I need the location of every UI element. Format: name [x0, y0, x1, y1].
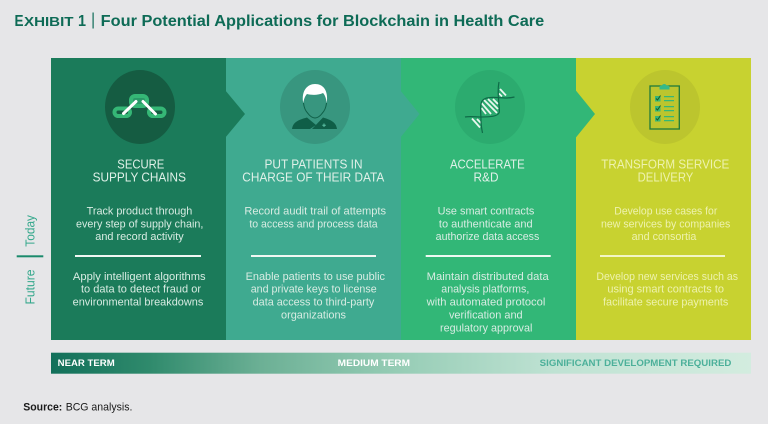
icon: DNA helix	[455, 70, 525, 144]
panel: put patients in charge	[225, 58, 401, 340]
heading: put patients in charge of their data: CHARGE OF THEIR DATA	[242, 169, 385, 184]
text: today: and consortia	[632, 231, 697, 243]
text: today: every step of supply chain,	[76, 218, 203, 230]
icon: chain links	[105, 70, 175, 144]
timeline bar	[51, 353, 751, 374]
heading: transform service delivery: TRANSFORM SERVICE	[601, 156, 730, 172]
text: today	[76, 206, 203, 243]
timeline bar: MEDIUM TERM	[338, 358, 410, 369]
text: future: facilitate secure payments	[603, 297, 729, 309]
heading: put patients in charge of their data	[242, 156, 385, 184]
text: future: to data to detect fraud or	[81, 284, 201, 296]
heading: transform service delivery: DELIVERY	[638, 169, 694, 184]
text: today	[244, 206, 387, 230]
title: E	[14, 13, 24, 30]
text: future: data access to third-party	[253, 297, 375, 309]
text: future: Develop new services such as	[596, 271, 739, 283]
text: future	[596, 271, 739, 309]
title: XHIBIT	[24, 15, 74, 29]
timeline bar: NEAR TERM	[58, 358, 115, 369]
heading: transform service delivery	[601, 156, 730, 184]
text: future: organizations	[281, 310, 346, 322]
panel: accelerate R&D	[400, 58, 576, 340]
text: today: Develop use cases for	[614, 206, 718, 218]
axis: today and future labels	[17, 214, 43, 304]
text: today: Record audit trail of attempts	[244, 206, 387, 218]
axis: today and future labels: Future	[24, 269, 38, 304]
heading: put patients in charge of their data: PUT PATIENTS IN	[264, 156, 362, 172]
text: future	[246, 271, 385, 322]
text: today: authorize data access	[436, 231, 540, 243]
text: future	[73, 271, 206, 309]
text: today	[436, 206, 540, 243]
text: today: and record activity	[95, 231, 184, 243]
text: today	[601, 206, 731, 243]
text: today: Track product through	[87, 206, 192, 218]
text: today: new services by companies	[601, 218, 731, 230]
text: future: regulatory approval	[440, 322, 532, 334]
text: future: and private keys to license	[251, 284, 377, 296]
panel: secure supply chains	[51, 58, 226, 340]
heading: accelerate R&D: R&D	[474, 169, 498, 184]
icon: clipboard checklist	[630, 70, 700, 144]
title: 1	[78, 13, 86, 30]
text: today: to access and process data	[249, 218, 378, 230]
text: future: Apply intelligent algorithms	[73, 271, 206, 283]
text: future: using smart contracts to	[607, 284, 724, 296]
text: future: analysis platforms,	[441, 284, 529, 296]
timeline bar: SIGNIFICANT DEVELOPMENT REQUIRED	[540, 358, 732, 369]
source note	[23, 402, 132, 414]
panel: transform service delivery	[576, 58, 751, 340]
text: future: verification and	[449, 310, 523, 322]
text: future: Enable patients to use public	[246, 271, 385, 283]
source note: BCG analysis.	[66, 402, 132, 414]
text: future: with automated protocol	[426, 297, 545, 309]
heading: accelerate R&D: ACCELERATE	[450, 156, 525, 172]
text: today: Use smart contracts	[438, 206, 535, 218]
heading: secure supply chains	[93, 156, 186, 184]
text: future: environmental breakdowns	[73, 297, 204, 309]
text: future	[426, 271, 550, 334]
heading: secure supply chains: SECURE	[117, 156, 165, 172]
text: today: to authenticate and	[439, 218, 533, 230]
icon: patient	[280, 70, 350, 144]
source note: Source:	[23, 402, 62, 414]
axis: today and future labels: Today	[24, 214, 38, 247]
text: future: Maintain distributed data	[427, 271, 550, 283]
heading: accelerate R&D	[450, 156, 525, 184]
heading: secure supply chains: SUPPLY CHAINS	[93, 169, 186, 184]
title: Four Potential Applications for Blockchain in Health Care	[101, 13, 544, 30]
